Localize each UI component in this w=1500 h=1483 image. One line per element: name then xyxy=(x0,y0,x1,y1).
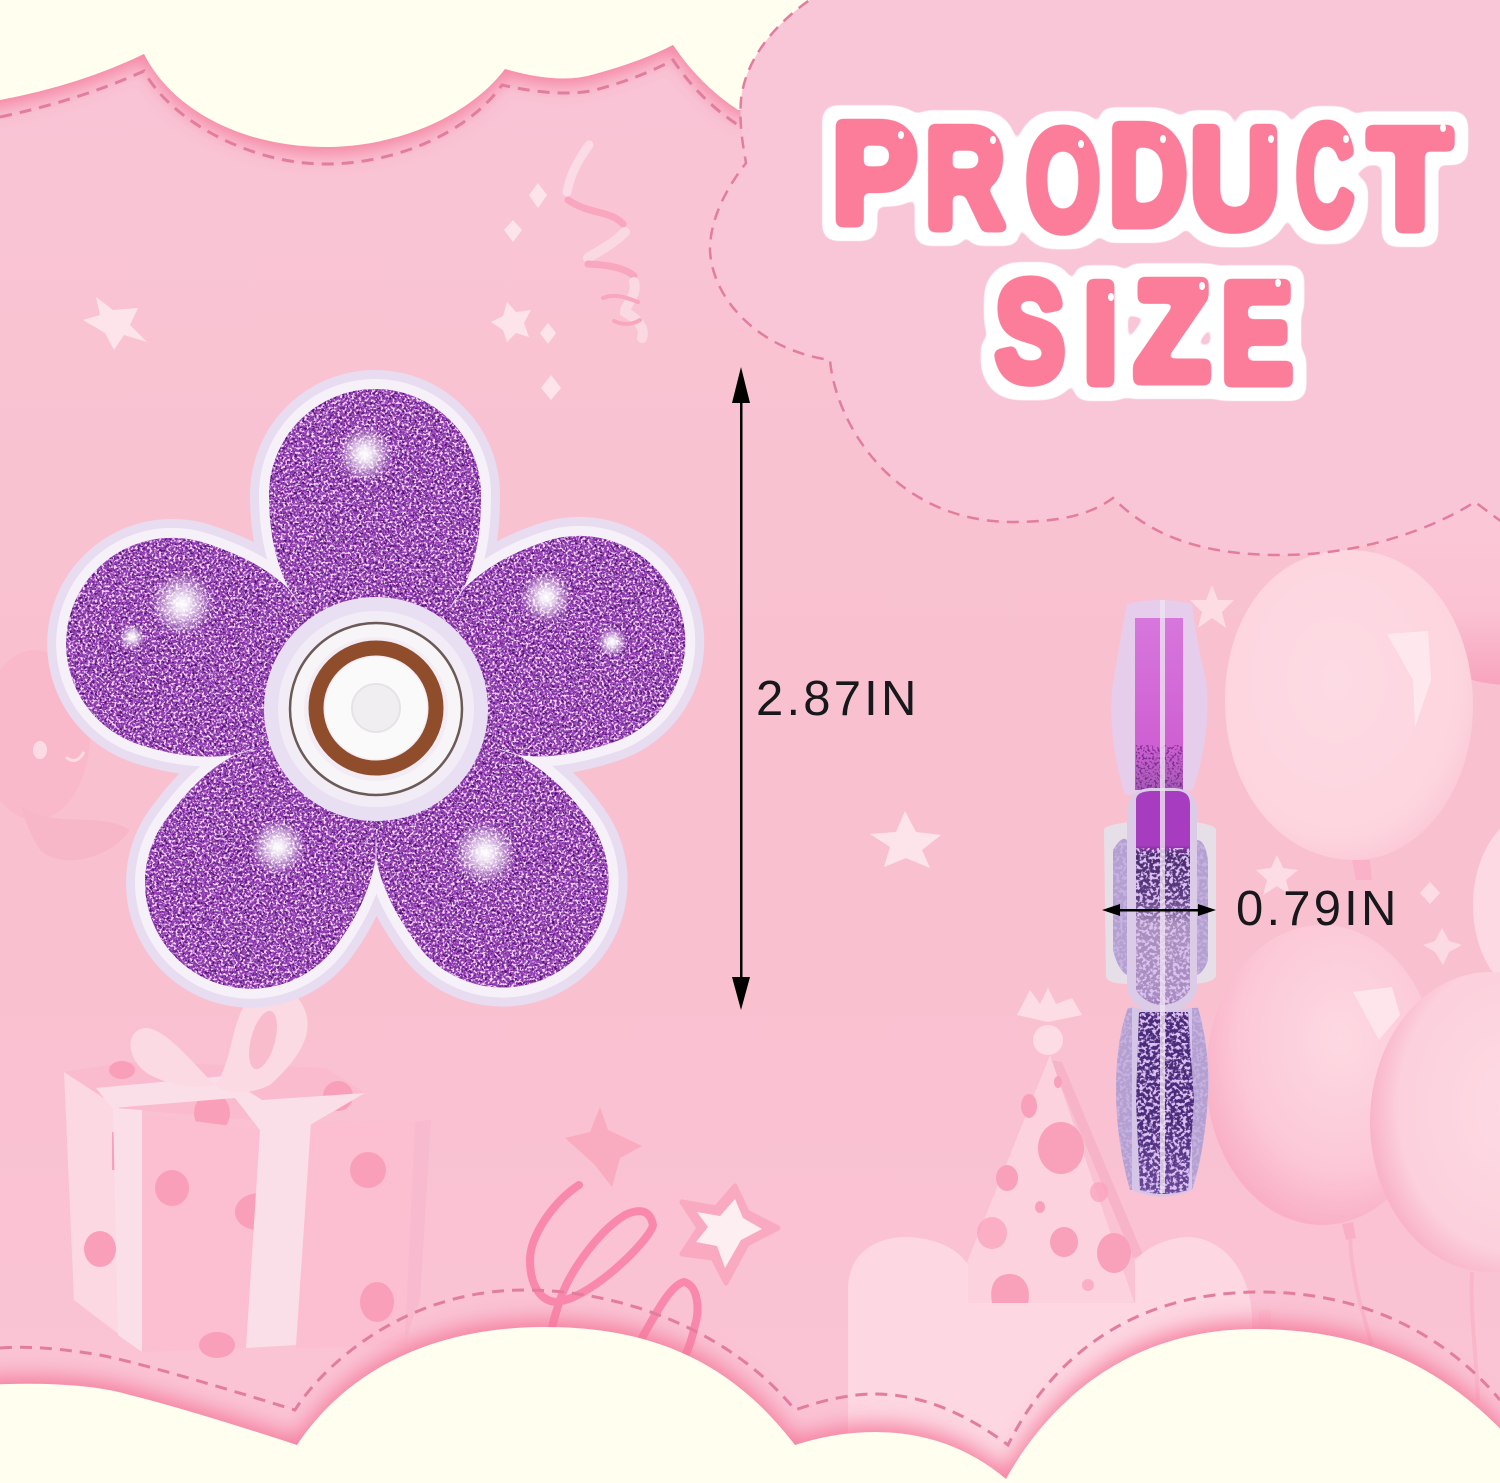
sparse glitter in column xyxy=(1136,745,1183,790)
decorative background: streamers and stars xyxy=(83,145,1462,965)
title letters: T xyxy=(1369,100,1451,259)
box right face xyxy=(296,1120,431,1348)
main top edge: cream scallop xyxy=(0,0,830,147)
left faint balloon character xyxy=(0,650,130,860)
cloud shapes below party hat xyxy=(848,1237,1252,1480)
letter highlights xyxy=(898,124,1446,301)
title letters: R xyxy=(925,99,1005,258)
hat dots xyxy=(977,1076,1131,1303)
far right balloon middle xyxy=(1473,813,1500,997)
hat shadow band xyxy=(1050,1060,1143,1258)
seam xyxy=(1160,600,1165,1193)
purple glitter xyxy=(66,389,686,989)
hat cone xyxy=(950,1055,1135,1305)
stitched dashes along bottom edge xyxy=(0,1290,1500,1445)
sparkle highlights xyxy=(119,426,627,885)
far right balloon top xyxy=(1375,435,1500,685)
title letters: P xyxy=(832,94,917,253)
balloon large top xyxy=(1225,550,1473,880)
party hat xyxy=(950,988,1143,1305)
title letters: S xyxy=(995,252,1065,411)
balloon lower right xyxy=(1370,972,1500,1272)
scribble xyxy=(530,1185,697,1358)
rim inner sheen xyxy=(39,389,713,1031)
ribbon xyxy=(96,1076,365,1352)
height label: 2.87IN xyxy=(756,672,920,726)
box left pale side xyxy=(64,1072,142,1352)
title letters: D xyxy=(1109,96,1187,255)
pink star xyxy=(565,1107,642,1187)
upper clear body xyxy=(1111,600,1207,795)
stitched dashes along top edge xyxy=(0,60,738,164)
title letters: E xyxy=(1221,254,1293,413)
stars xyxy=(83,183,1462,965)
main bottom edge: cream scallop xyxy=(0,1327,1500,1483)
side lilac glitter xyxy=(1113,838,1208,1190)
title letters: U xyxy=(1190,99,1280,258)
title letters: I xyxy=(1083,254,1118,413)
title letters: O xyxy=(1026,101,1100,260)
width label: 0.79IN xyxy=(1236,882,1400,936)
polka dots xyxy=(84,1132,394,1358)
product: flower spinner front view xyxy=(39,360,720,1031)
title letters: Z xyxy=(1134,252,1210,411)
balloon strings xyxy=(1265,1238,1478,1400)
hub glitter xyxy=(1136,791,1190,1005)
width dimension arrow xyxy=(1102,904,1216,916)
gift box xyxy=(64,985,431,1358)
balloon lower left xyxy=(1206,925,1438,1240)
height dimension arrow xyxy=(732,367,750,1010)
top dots xyxy=(109,1061,353,1133)
pink liquid column xyxy=(1135,618,1183,790)
hub body xyxy=(1127,788,1197,1014)
bow xyxy=(131,985,308,1092)
streamer xyxy=(567,145,643,338)
side tabs xyxy=(1104,822,1216,984)
balloons xyxy=(1206,435,1500,1400)
lower glitter xyxy=(1136,1012,1194,1194)
title cloud panel xyxy=(710,0,1500,555)
center hub xyxy=(264,597,488,821)
box front xyxy=(125,1112,262,1352)
title: product size xyxy=(832,94,1451,413)
product: flower spinner side view xyxy=(1100,600,1220,1200)
lower clear body xyxy=(1116,1006,1209,1196)
pompom xyxy=(1017,988,1082,1055)
title letters xyxy=(832,94,1451,413)
outlined star xyxy=(682,1186,778,1283)
box top xyxy=(64,1062,365,1125)
clear rim xyxy=(39,389,713,1031)
title letters: C xyxy=(1296,96,1354,255)
